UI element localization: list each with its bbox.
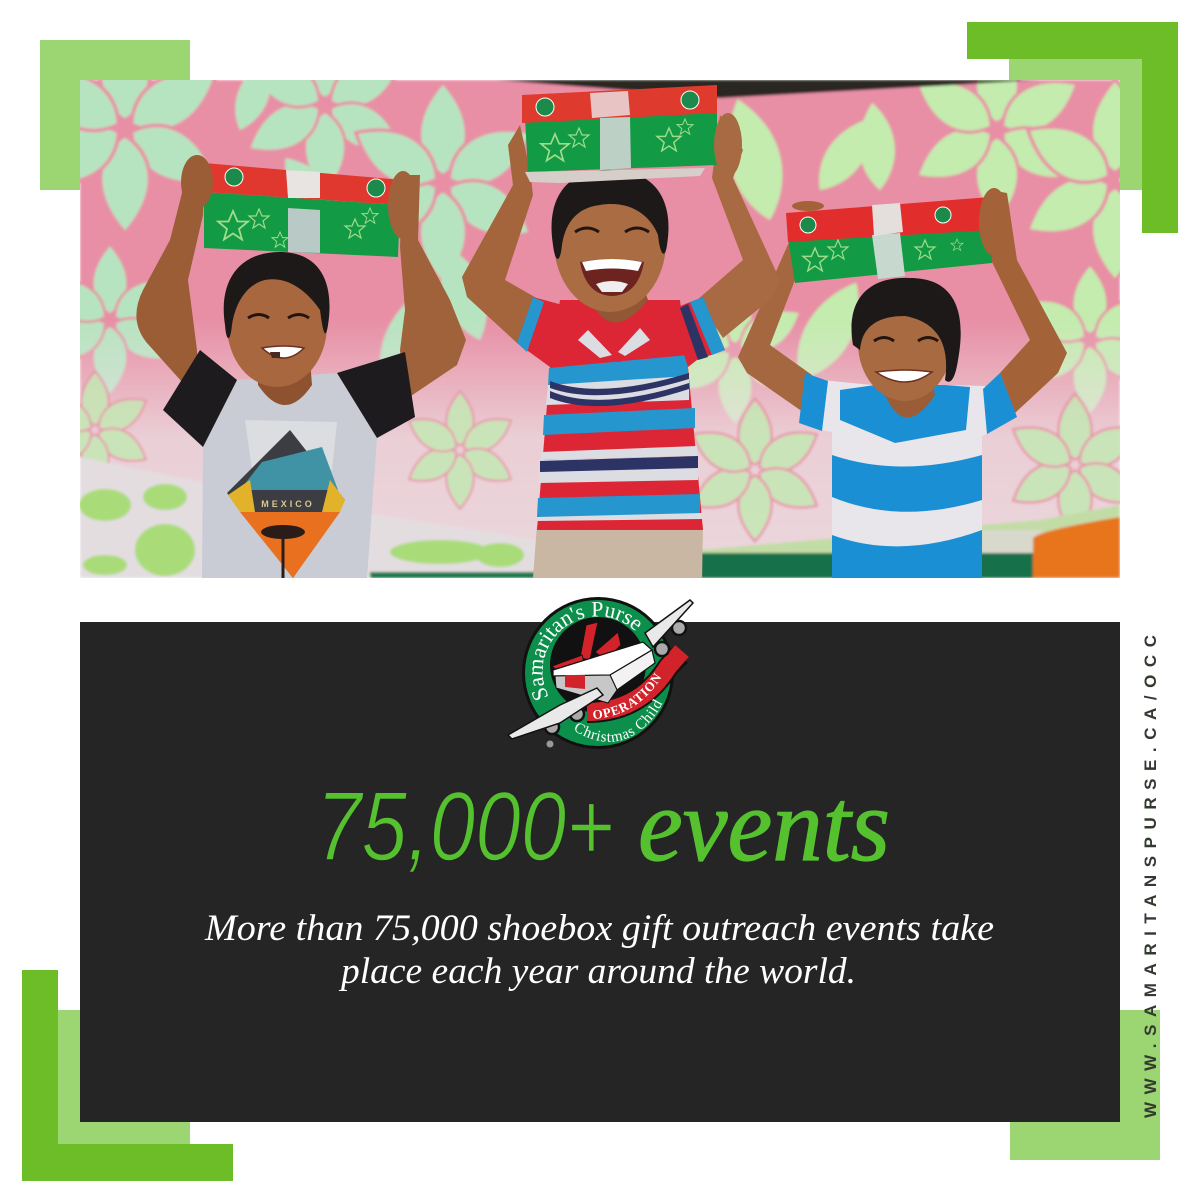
body text: More than 75,000 shoebox gift outreach events take bbox=[204, 908, 994, 949]
heading: 75,000+ events: 75,000+ bbox=[316, 771, 614, 881]
photo: three children holding shoebox gifts bbox=[80, 80, 1120, 578]
child: right, blue and white polo bbox=[738, 190, 1067, 578]
dark wedge above banner bbox=[497, 80, 1040, 98]
body text: place each year around the world. bbox=[338, 951, 856, 992]
shoebox gift: left bbox=[181, 155, 418, 257]
logo gift box bbox=[553, 642, 652, 676]
logo lettering: Samaritan's Purse: Samaritan's Purse bbox=[532, 602, 640, 700]
logo registered mark bbox=[546, 740, 554, 748]
logo wheels bbox=[545, 621, 686, 734]
logo: Operation Christmas Child bbox=[507, 597, 694, 749]
photo backdrop: floral banner bbox=[80, 80, 1120, 578]
logo lettering: Christmas Child: Christmas Child bbox=[575, 698, 662, 742]
corner bracket: top left bbox=[40, 40, 190, 190]
heading: 75,000+ events: events bbox=[638, 768, 890, 883]
logo lettering: Operation: OPERATION bbox=[593, 672, 662, 719]
corner bracket: bottom right bbox=[1010, 1010, 1160, 1160]
shoebox gift: right bbox=[786, 188, 1009, 283]
logo wings bbox=[508, 688, 603, 739]
corner bracket: top right bbox=[967, 22, 1178, 233]
pale lower fade of the banner bbox=[80, 334, 1120, 578]
shoebox gift: centre bbox=[522, 85, 742, 183]
shirt print: Mexico palm graphic bbox=[227, 430, 345, 578]
logo roundel bbox=[522, 597, 674, 749]
lower wall below banner bbox=[80, 456, 202, 538]
shirt print: Mexico palm graphic: MEXICO bbox=[261, 499, 315, 509]
logo ribbon bbox=[587, 655, 680, 712]
logo bow bbox=[552, 622, 621, 672]
vertical website address: WWW.SAMARITANSPURSE.CA/OCC bbox=[1141, 635, 1160, 1118]
shirt sleeves bbox=[517, 297, 560, 367]
dark text panel bbox=[80, 622, 1120, 1122]
child: centre, striped shirt bbox=[462, 115, 780, 578]
corner bracket: bottom left bbox=[22, 970, 233, 1181]
child: left, Mexico t-shirt bbox=[136, 155, 466, 578]
